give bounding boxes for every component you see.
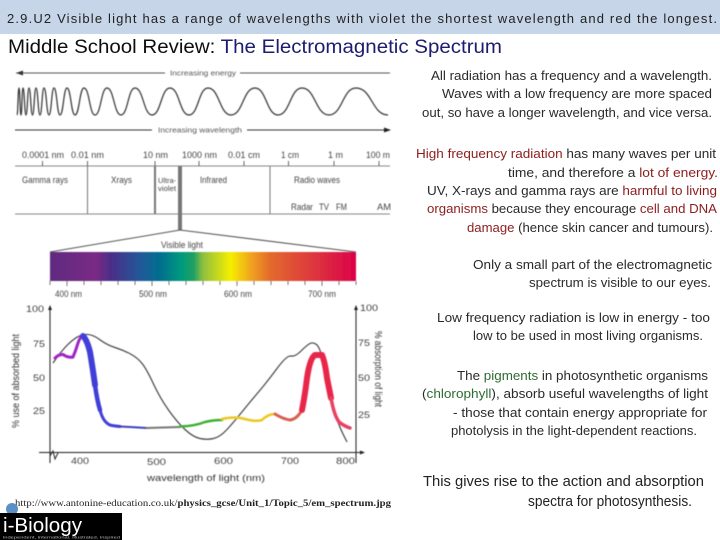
spectrum bands: FM bbox=[336, 202, 347, 212]
text block: pigments: (chlorophyll), absorb useful wavelengths of light bbox=[422, 386, 708, 401]
spectrum bands: Infrared bbox=[200, 175, 227, 185]
x axis labels: 700 bbox=[281, 456, 299, 466]
text block: high frequency radiation bbox=[416, 146, 718, 235]
logo: i-Biology: independent, international, illustrated, inspired bbox=[3, 534, 120, 540]
logo: i-Biology bbox=[0, 503, 122, 540]
text block: high frequency radiation: time, and therefore a lot of energy. bbox=[508, 165, 718, 180]
spectrum bands: Xrays bbox=[111, 175, 132, 185]
wavelength scale: 1 m bbox=[328, 150, 343, 160]
x axis labels: 600 bbox=[214, 456, 233, 466]
text block: pigments: photolysis in the light-dependent reactions. bbox=[451, 423, 697, 438]
left axis labels: 75 bbox=[33, 339, 45, 349]
right column text bbox=[416, 68, 718, 510]
header banner: 2.9.U2 Visible light has a range of wavelengths with violet the shortest wavelength and red the longest. bbox=[7, 11, 717, 26]
chart axes bbox=[39, 305, 365, 463]
x axis labels bbox=[71, 456, 355, 483]
wave: frequency decreasing left to right bbox=[17, 88, 388, 115]
left axis labels: 25 bbox=[33, 406, 45, 416]
x axis labels: 800 bbox=[336, 456, 355, 466]
x axis labels: 400 bbox=[71, 456, 89, 466]
text block: radiation basics: Waves with a low frequency are more spaced bbox=[442, 86, 712, 101]
wavelength scale: 0.01 nm bbox=[71, 150, 104, 160]
action spectrum curve bbox=[55, 336, 350, 428]
right axis labels: 75 bbox=[358, 338, 370, 348]
left axis labels: 50 bbox=[33, 373, 45, 383]
header banner bbox=[0, 0, 720, 34]
right axis labels bbox=[358, 303, 383, 420]
text block: radiation basics: out, so have a longer wavelength, and vice versa. bbox=[422, 105, 712, 120]
wavelength scale: 1 cm bbox=[281, 150, 299, 160]
left axis labels: 100 bbox=[26, 304, 44, 314]
text block: low frequency radiation: Low frequency radiation is low in energy - too bbox=[437, 310, 710, 325]
arrow: increasing wavelength: Increasing wavelength bbox=[158, 126, 242, 134]
spectrum bands: AM bbox=[377, 202, 391, 212]
text block: high frequency radiation: organisms because they encourage cell and DNA bbox=[427, 201, 717, 216]
spectrum bands: Radio waves bbox=[294, 175, 340, 185]
right axis labels: 50 bbox=[358, 373, 370, 383]
wavelength scale: 0.01 cm bbox=[228, 150, 260, 160]
right axis labels: 100 bbox=[360, 303, 378, 313]
text block: visible part of spectrum: spectrum is visible to our eyes. bbox=[529, 275, 711, 290]
visible light spectrum bar: 400 nm bbox=[55, 289, 82, 299]
arrow: increasing energy bbox=[16, 68, 390, 78]
x axis labels: 500 bbox=[147, 457, 166, 467]
text block: radiation basics bbox=[422, 68, 712, 120]
arrow: increasing wavelength bbox=[15, 126, 391, 134]
x axis labels: wavelength of light (nm) bbox=[146, 473, 265, 483]
text block: visible part of spectrum bbox=[473, 257, 713, 290]
text block: visible part of spectrum: Only a small part of the electromagnetic bbox=[473, 257, 713, 272]
spectrum bands bbox=[22, 166, 391, 230]
text block: high frequency radiation: UV, X-rays and gamma rays are harmful to living bbox=[427, 183, 717, 198]
chart: action and absorption spectra bbox=[11, 303, 383, 483]
visible light callout bbox=[50, 230, 356, 252]
text block: pigments bbox=[422, 368, 709, 438]
image source URL: http://www.antonine-education.co.uk/ physics_gcse/Unit_1/Topic_5/em_spectrum.jpg bbox=[15, 499, 391, 509]
spectrum bands: Ultra- bbox=[158, 176, 176, 185]
visible light callout: Visible light bbox=[161, 240, 203, 250]
text block: low frequency radiation: low to be used in most living organisms. bbox=[473, 328, 703, 343]
spectrum bands: TV bbox=[319, 202, 329, 212]
visible light spectrum bar: 700 nm bbox=[308, 289, 336, 299]
right axis labels: % absorption of light bbox=[372, 331, 383, 407]
diagram: electromagnetic spectrum bbox=[15, 68, 391, 299]
text block: action and absorption spectra bbox=[423, 474, 704, 510]
left axis labels: % use of absorbed light bbox=[11, 334, 22, 428]
spectrum bands: Radar bbox=[291, 202, 313, 212]
visible light spectrum bar bbox=[50, 252, 356, 299]
text block: action and absorption spectra: This gives rise to the action and absorption bbox=[423, 474, 704, 490]
wavelength scale bbox=[15, 150, 390, 214]
text block: low frequency radiation bbox=[437, 310, 710, 343]
absorption curve bbox=[53, 334, 347, 442]
spectrum bands: Gamma rays bbox=[22, 175, 68, 185]
wavelength scale: 0.0001 nm bbox=[22, 150, 64, 160]
wavelength scale: 10 nm bbox=[143, 150, 168, 160]
wavelength scale: 100 m bbox=[366, 150, 390, 160]
visible light spectrum bar: 500 nm bbox=[139, 289, 167, 299]
text block: radiation basics: All radiation has a frequency and a wavelength. bbox=[431, 68, 712, 83]
wavelength scale: 1000 nm bbox=[182, 150, 217, 160]
text block: pigments: - those that contain energy appropriate for bbox=[453, 405, 708, 420]
logo: i-Biology: i-Biology bbox=[3, 515, 82, 537]
left axis labels bbox=[11, 304, 45, 428]
right axis labels: 25 bbox=[358, 410, 370, 420]
arrow: increasing energy: Increasing energy bbox=[170, 68, 236, 78]
text block: pigments: The pigments in photosynthetic organisms bbox=[457, 368, 709, 383]
text block: high frequency radiation: High frequency radiation has many waves per unit bbox=[416, 146, 716, 161]
spectrum bands: violet bbox=[158, 184, 177, 193]
visible light spectrum bar: 600 nm bbox=[224, 289, 252, 299]
text block: high frequency radiation: damage (hence skin cancer and tumours). bbox=[467, 220, 713, 235]
text block: action and absorption spectra: spectra for photosynthesis. bbox=[528, 494, 692, 510]
title: Middle School Review: The Electromagnetic Spectrum bbox=[8, 37, 502, 58]
